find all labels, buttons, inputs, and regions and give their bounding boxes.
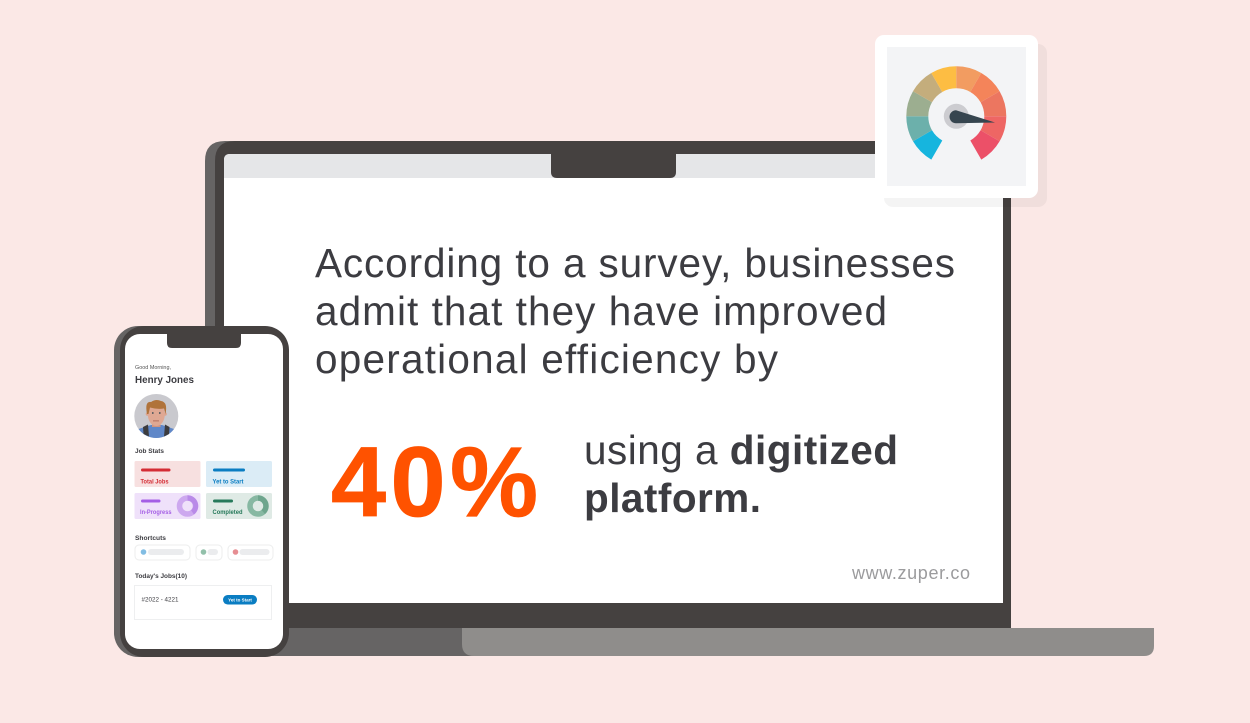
laptop [205,141,1154,656]
stat: yet to start: Yet to Start [212,480,244,486]
laptop base [205,628,505,656]
stat: total jobs [134,461,200,487]
stat: total jobs: Total Jobs [140,480,169,486]
headline text: According to a survey, businesses [315,240,955,286]
job stats heading: Job Stats [135,448,164,455]
shortcuts heading: Shortcuts [135,535,166,542]
stat: completed: Completed [212,510,243,516]
headline text: operational efficiency by [315,336,779,382]
phone [114,326,289,657]
jobs heading: Today's Jobs(10) [135,573,187,580]
shortcut pills [135,545,273,560]
laptop screen [224,154,1003,603]
headline text: admit that they have improved [315,288,887,334]
job card: #2022 - 4221 [142,598,179,604]
job card: Yet to Start [228,598,252,602]
gauge needle [950,110,995,123]
camera notch [551,154,676,178]
greeting: Good Morning, [135,365,171,371]
statistic: 40%: 40% [331,426,538,537]
gauge card [875,35,1047,207]
stat: completed [206,493,272,519]
stat: yet to start [206,461,272,487]
headline text [315,240,955,382]
website url: www.zuper.co [851,563,970,583]
user name: Henry Jones [135,375,194,386]
laptop base front [462,628,1154,656]
stat: in-progress: In-Progress [140,510,172,516]
job card [134,586,272,620]
supporting text [584,427,898,521]
supporting text: using a digitized [584,427,898,473]
browser top bar [224,154,1003,178]
supporting text: platform. [584,475,761,521]
icon: speedometer gauge [906,66,1006,160]
phone notch [167,334,241,348]
avatar [134,394,178,438]
stat: in-progress [134,493,200,519]
status badge [223,595,257,604]
phone screen [125,334,283,649]
